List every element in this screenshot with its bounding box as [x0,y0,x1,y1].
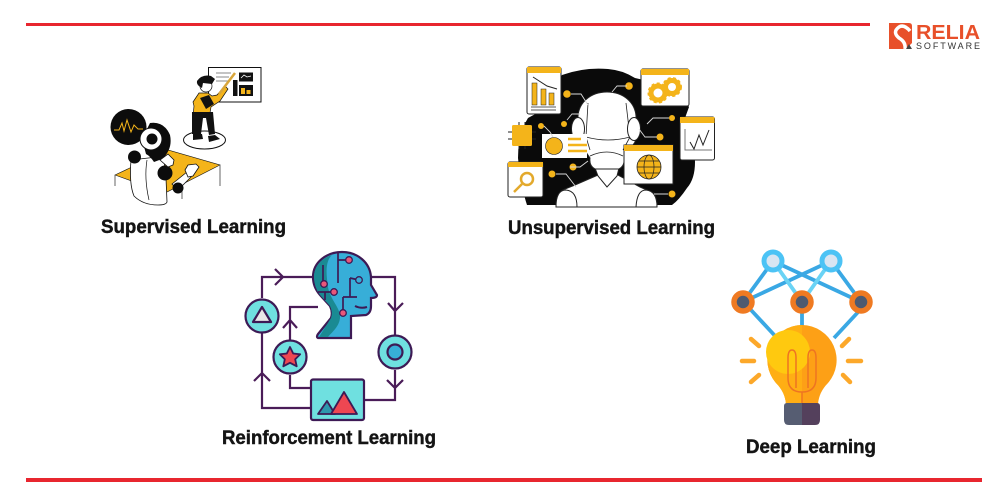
connector nodes [538,82,676,198]
light rays [742,339,861,382]
input nodes [764,252,840,270]
magnifier window [508,162,543,197]
illustration: supervised learning [110,68,261,205]
chip [508,122,536,149]
illustration: deep learning lightbulb [734,252,870,425]
top red rule [26,23,870,26]
network links [743,261,861,338]
triangle circle [246,300,278,332]
illustration: reinforcement learning [246,252,412,420]
bottom red rule [26,478,982,482]
student robot with speech circle [110,109,220,205]
globe window [624,145,673,184]
logo: Relia Software [889,22,980,51]
body [130,157,167,205]
heading: deep learning: Deep Learning [746,436,876,458]
board [208,68,261,102]
cycle lines and arrows [254,269,403,408]
line chart window [680,117,714,160]
head [313,252,377,338]
hidden nodes [734,293,870,311]
heading: reinforcement learning: Reinforcement Learning [222,427,436,449]
donut circle [378,336,412,368]
star circle [274,340,306,374]
illustration: unsupervised learning [508,67,714,207]
chart window [527,67,561,114]
table [115,150,220,193]
teacher [184,73,235,149]
gears window [641,69,689,106]
mountain picture [311,380,364,420]
heading: supervised learning: Supervised Learning [101,216,286,238]
logo: Relia Software: RELIA [916,22,980,44]
logo: Relia Software: SOFTWARE [916,41,980,51]
robot bust [556,92,657,207]
profile card [542,134,587,158]
heading: unsupervised learning: Unsupervised Learning [508,217,715,239]
bulb [766,325,837,425]
black blob [518,69,695,205]
